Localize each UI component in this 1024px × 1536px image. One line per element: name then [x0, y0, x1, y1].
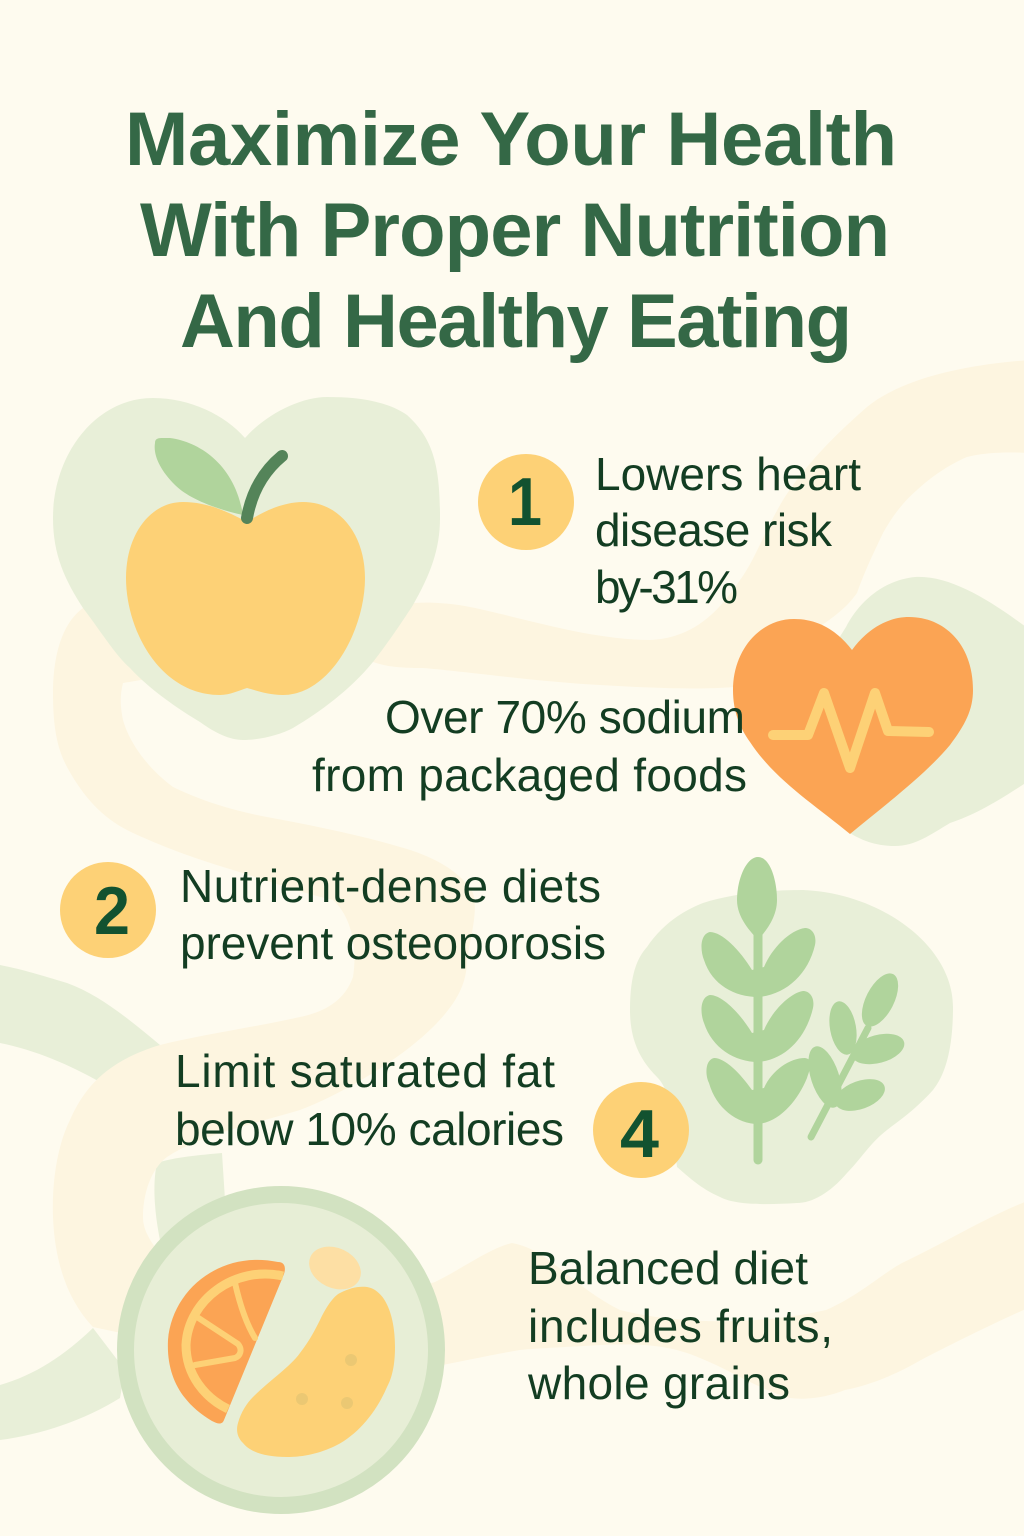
badge 4 [593, 1082, 689, 1178]
text: balanced diet [527, 1242, 833, 1409]
text: heart disease [595, 448, 861, 613]
title: And Healthy Eating [180, 279, 852, 364]
text: balanced diet: Balanced diet [528, 1242, 808, 1294]
text: saturated fat: Limit saturated fat [175, 1045, 555, 1097]
badge 2 [60, 862, 156, 958]
icon: plate with orange and mango [126, 1194, 436, 1506]
text: osteoporosis: Nutrient-dense diets [180, 860, 601, 912]
text: heart disease: Lowers heart [595, 448, 861, 500]
text: balanced diet: whole grains [527, 1357, 790, 1409]
icon: apple on heart blob [53, 397, 440, 740]
text: sodium: from packaged foods [312, 749, 747, 801]
text: saturated fat: below 10% calories [175, 1103, 564, 1155]
badge 4: 4 [620, 1096, 659, 1172]
text: saturated fat [175, 1045, 564, 1155]
badge 2: 2 [94, 873, 130, 949]
text: osteoporosis: prevent osteoporosis [180, 917, 606, 969]
text: balanced diet: includes fruits, [528, 1300, 833, 1352]
title: Maximize Your Health [125, 97, 897, 182]
text: sodium [312, 691, 747, 801]
text: heart disease: disease risk [595, 504, 833, 556]
icon: plant sprigs on blob [630, 857, 953, 1204]
title: With Proper Nutrition [140, 188, 890, 273]
title [125, 97, 897, 364]
icon: heart with pulse [733, 577, 1024, 846]
badge 1 [478, 454, 574, 550]
text: sodium: Over 70% sodium [385, 691, 745, 743]
badge 1: 1 [508, 464, 542, 540]
text: osteoporosis [180, 860, 606, 969]
text: heart disease: by-31% [595, 561, 738, 613]
